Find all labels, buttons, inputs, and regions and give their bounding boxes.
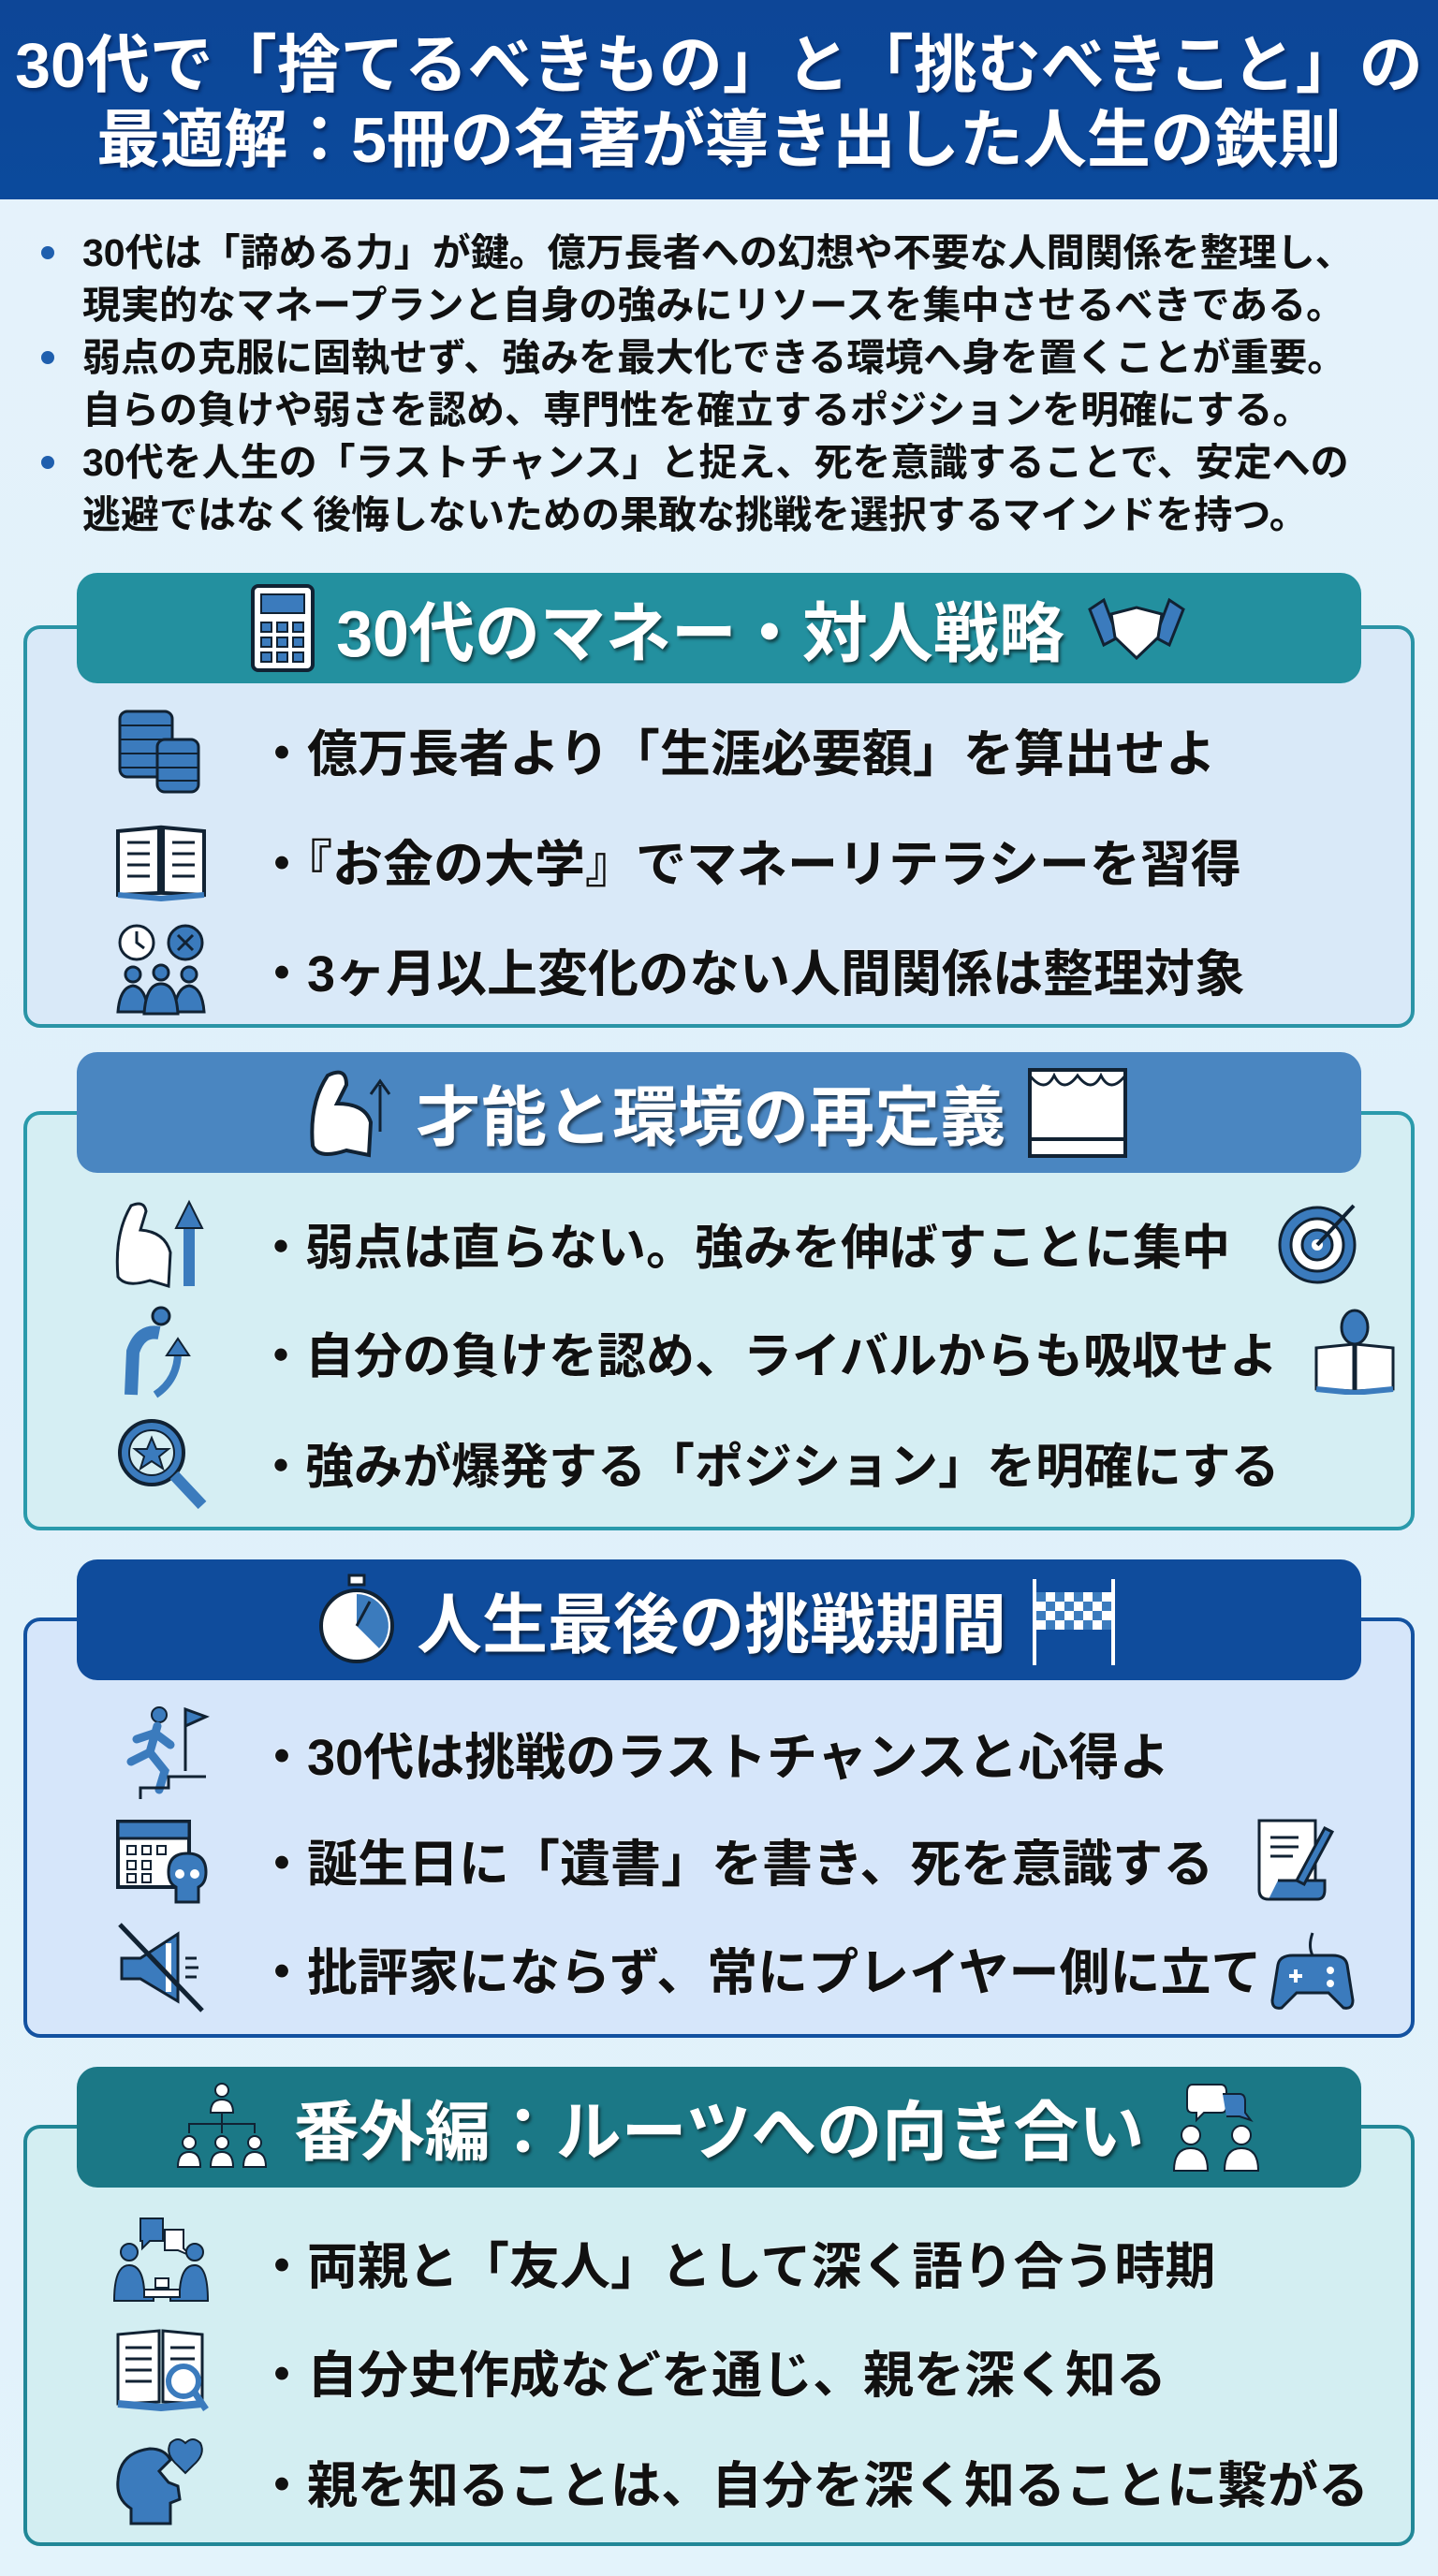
- item: calendar skull: ・誕生日に「遺書」を書き、死を意識する: [257, 1837, 1213, 1893]
- panel: roots: [23, 2067, 1415, 2546]
- icon: stopwatch: [319, 1574, 394, 1663]
- item: runner: [127, 1706, 1169, 1799]
- heading: roots: 番外編：ルーツへの向き合い: [294, 2096, 1144, 2169]
- panel: last challenge period: [23, 1559, 1415, 2038]
- icon: calculator: [251, 584, 315, 672]
- item: conversation with parents: [113, 2217, 1215, 2302]
- item: accept defeat: ・自分の負けを認め、ライバルからも吸収せよ: [257, 1329, 1278, 1383]
- item: magnifier star: ・強みが爆発する「ポジション」を明確にする: [257, 1440, 1280, 1494]
- item: coins: [118, 710, 1216, 794]
- item: magnifier star: [118, 1419, 1280, 1509]
- summary bullets: 弱点の克服に固執せず、強みを最大化できる環境へ身を置くことが重要。: [82, 336, 1345, 379]
- summary bullets: 自らの負けや弱さを認め、専門性を確立するポジションを明確にする。: [82, 388, 1311, 432]
- panel: talent and environment: [23, 1052, 1415, 1530]
- item: conversation with parents: ・両親と「友人」として深く語り合う時期: [257, 2239, 1215, 2295]
- panel: money and relationships: [23, 573, 1415, 1028]
- summary bullets: 30代を人生の「ラストチャンス」と捉え、死を意識することで、安定への: [82, 441, 1349, 484]
- item: strengths: ・弱点は直らない。強みを伸ばすことに集中: [257, 1221, 1230, 1275]
- summary bullets: [41, 231, 1354, 536]
- heading: talent: [77, 1052, 1361, 1173]
- item: accept defeat: [125, 1307, 1278, 1398]
- item: coins: ・億万長者より「生涯必要額」を算出せよ: [257, 726, 1216, 783]
- item: people clock: ・3ヶ月以上変化のない人間関係は整理対象: [257, 945, 1245, 1002]
- icon: game controller: [1271, 1932, 1354, 2010]
- icon: arm: [310, 1071, 391, 1157]
- title: [0, 0, 1438, 199]
- heading: last challenge: 人生最後の挑戦期間: [417, 1588, 1006, 1661]
- heading: money strategy: 30代のマネー・対人戦略: [336, 597, 1064, 670]
- item: strengths: [116, 1200, 1230, 1288]
- item: head heart: ・親を知ることは、自分を深く知ることに繋がる: [257, 2458, 1369, 2514]
- item: megaphone crossed: ・批評家にならず、常にプレイヤー側に立て: [257, 1945, 1262, 2001]
- title: 最適解：5冊の名著が導き出した人生の鉄則: [96, 105, 1342, 176]
- item: head heart: [116, 2438, 1369, 2525]
- item: runner: ・30代は挑戦のラストチャンスと心得よ: [257, 1730, 1169, 1786]
- icon: checkered flag: [1033, 1579, 1115, 1665]
- heading: money strategy: [77, 573, 1361, 683]
- heading: talent: 才能と環境の再定義: [416, 1081, 1005, 1154]
- item: people clock: [116, 925, 1245, 1015]
- icon: family tree: [177, 2083, 267, 2168]
- title: 30代で「捨てるべきもの」と「挑むべきこと」の: [15, 30, 1423, 101]
- heading: last challenge: [77, 1559, 1361, 1680]
- icon: lightbulb book: [1314, 1309, 1395, 1395]
- item: megaphone crossed: [118, 1923, 1262, 2012]
- summary bullets: 逃避ではなく後悔しないための果敢な挑戦を選択するマインドを持つ。: [82, 493, 1308, 536]
- icon: scroll pen: [1258, 1820, 1334, 1900]
- icon: target: [1279, 1204, 1356, 1284]
- summary bullets: 現実的なマネープランと自身の強みにリソースを集中させるべきである。: [82, 284, 1344, 327]
- item: calendar skull: [116, 1820, 1213, 1904]
- heading: roots: [77, 2067, 1361, 2188]
- icon: handshake: [1088, 597, 1185, 660]
- icon: two people talking: [1173, 2084, 1259, 2172]
- summary bullets: 30代は「諦める力」が鍵。億万長者への幻想や不要な人間関係を整理し、: [82, 231, 1354, 274]
- item: book magnifier: [116, 2329, 1167, 2411]
- item: book: ・『お金の大学』でマネーリテラシーを習得: [257, 837, 1241, 893]
- item: book: [116, 826, 1241, 901]
- icon: stage: [1028, 1068, 1127, 1158]
- item: book magnifier: ・自分史作成などを通じ、親を深く知る: [257, 2348, 1167, 2404]
